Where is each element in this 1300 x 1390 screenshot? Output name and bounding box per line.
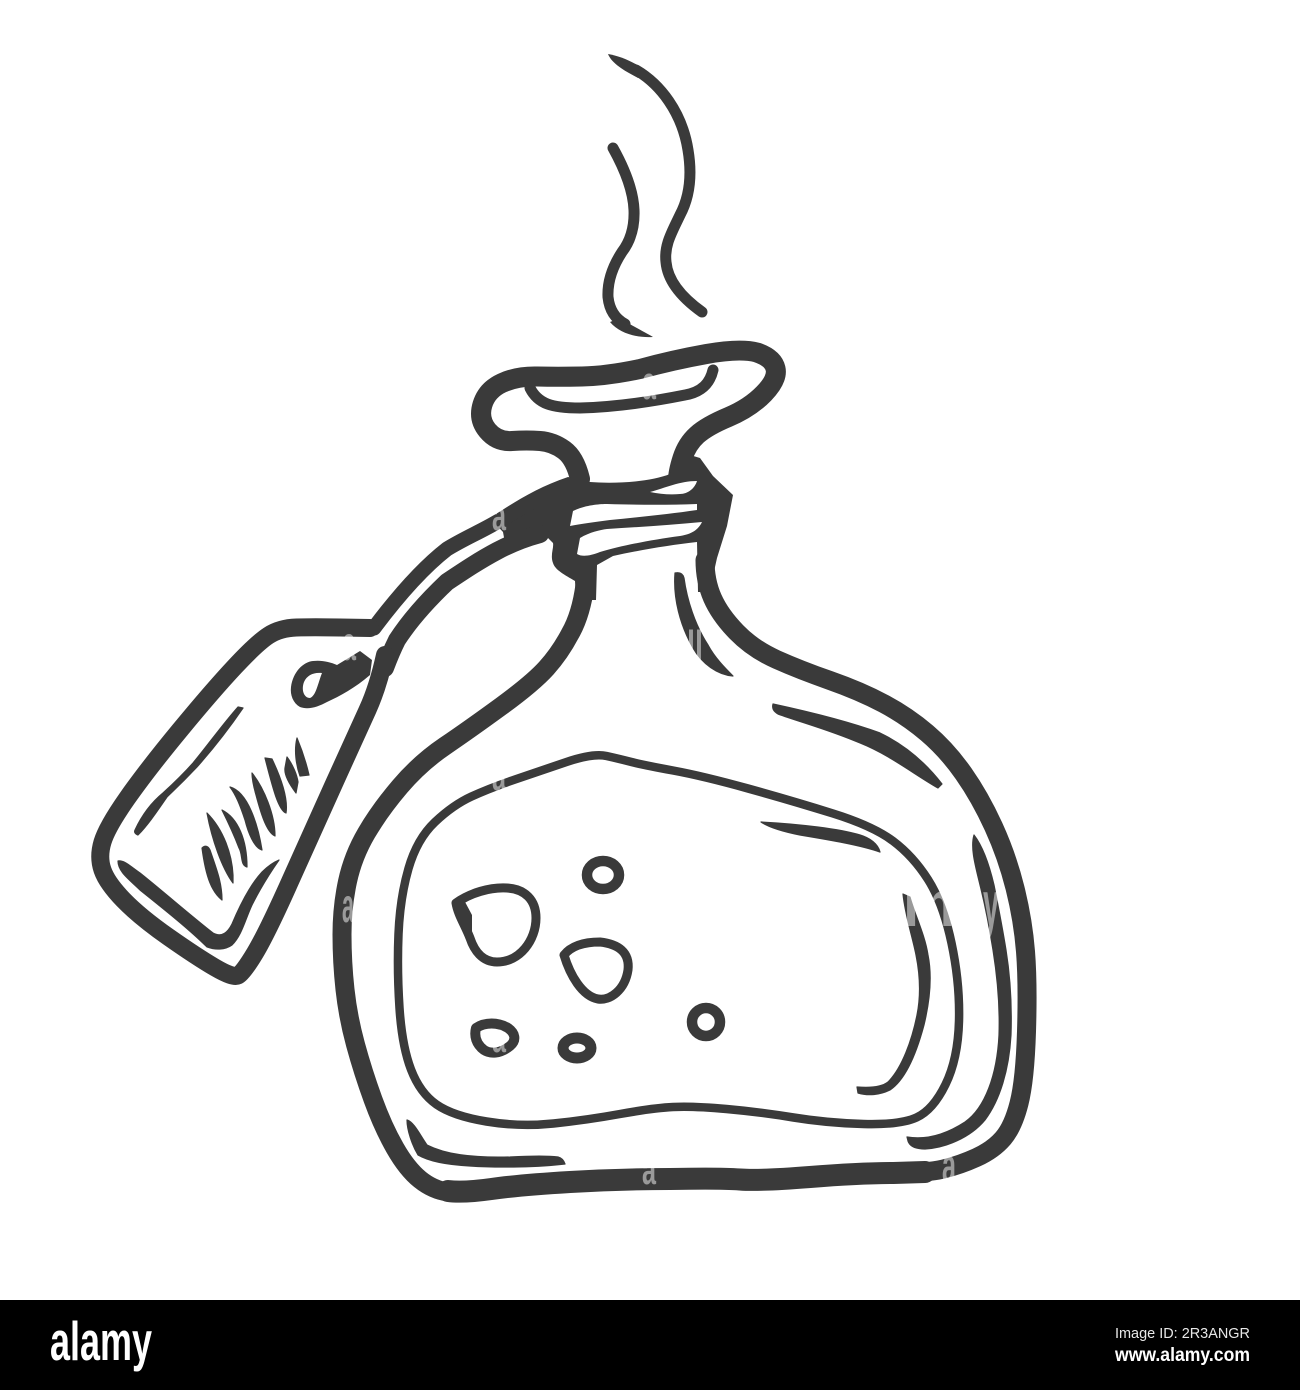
logo wordmark: alamy	[50, 1310, 152, 1372]
neck knot with string wraps	[490, 452, 733, 600]
stock watermark marks	[342, 356, 999, 1193]
stock watermark marks: a	[492, 752, 506, 799]
website url: www.alamy.com	[1114, 1345, 1250, 1366]
stock watermark marks: a	[642, 1146, 656, 1193]
bottle stopper	[481, 351, 776, 480]
tag inner line upper	[135, 707, 243, 835]
stock watermark marks: a	[942, 1140, 956, 1193]
string from knot to tag	[374, 497, 540, 668]
glass highlights	[407, 573, 1011, 1167]
tag hatch marks	[202, 738, 309, 900]
image id: Image ID: 2R3ANGR	[1115, 1325, 1250, 1342]
stock watermark marks: a	[492, 1014, 506, 1061]
liquid surface outline	[398, 755, 959, 1125]
stock watermark marks: a	[492, 492, 506, 539]
stock watermark marks: ll	[687, 622, 703, 671]
bubbles in liquid	[453, 861, 720, 1058]
stock watermark marks: a	[642, 356, 656, 409]
bottle outline	[342, 560, 1027, 1193]
icon: rising steam	[608, 54, 702, 337]
tag inner line lower	[118, 860, 279, 949]
stock watermark marks: a	[342, 880, 354, 933]
stock watermark marks: m	[903, 868, 955, 940]
tag hole loop	[291, 651, 372, 708]
potion bottle illustration: y	[983, 868, 999, 940]
gift tag	[100, 627, 385, 976]
footer bar	[0, 1300, 1300, 1390]
stock watermark marks: a	[342, 618, 356, 671]
